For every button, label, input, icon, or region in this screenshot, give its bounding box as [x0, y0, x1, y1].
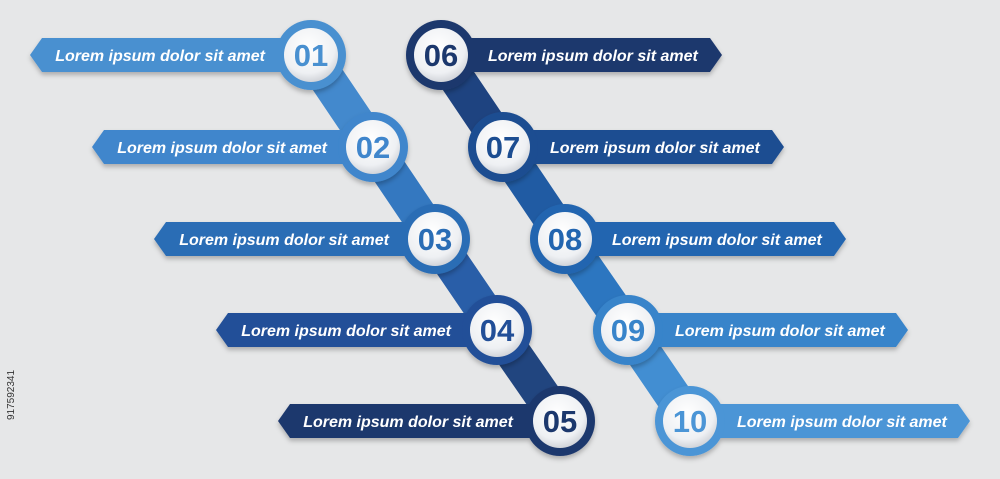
- step 06: [406, 20, 722, 90]
- step 02: 02: [356, 130, 390, 165]
- side id text: 917592341: [6, 370, 17, 420]
- step 08: 08: [548, 222, 582, 257]
- step 01: 01: [294, 38, 328, 73]
- step 06: Lorem ipsum dolor sit amet: [488, 48, 698, 65]
- step 07: [468, 112, 784, 182]
- step 01: [30, 20, 346, 90]
- step 08: Lorem ipsum dolor sit amet: [612, 232, 822, 249]
- step 02: Lorem ipsum dolor sit amet: [117, 140, 328, 157]
- step 04: [216, 295, 532, 365]
- step 05: 05: [543, 404, 577, 439]
- step 03: Lorem ipsum dolor sit amet: [179, 232, 390, 249]
- step 06: 06: [424, 38, 458, 73]
- step 09: Lorem ipsum dolor sit amet: [675, 323, 885, 340]
- step 07: Lorem ipsum dolor sit amet: [550, 140, 760, 157]
- step 08: [530, 204, 846, 274]
- step 04: Lorem ipsum dolor sit amet: [241, 323, 452, 340]
- step 01: Lorem ipsum dolor sit amet: [55, 48, 266, 65]
- step 09: [593, 295, 908, 365]
- step 10: 10: [673, 404, 707, 439]
- step 09: 09: [611, 313, 645, 348]
- step 02: [92, 112, 408, 182]
- step 04: 04: [480, 313, 515, 348]
- step 07: 07: [486, 130, 520, 165]
- step 10: [655, 386, 970, 456]
- step 05: Lorem ipsum dolor sit amet: [303, 414, 514, 431]
- connectors: right chain: [441, 55, 690, 421]
- step 03: [154, 204, 470, 274]
- step 10: Lorem ipsum dolor sit amet: [737, 414, 947, 431]
- step 03: 03: [418, 222, 452, 257]
- step 05: [278, 386, 595, 456]
- connectors: left chain: [311, 55, 560, 421]
